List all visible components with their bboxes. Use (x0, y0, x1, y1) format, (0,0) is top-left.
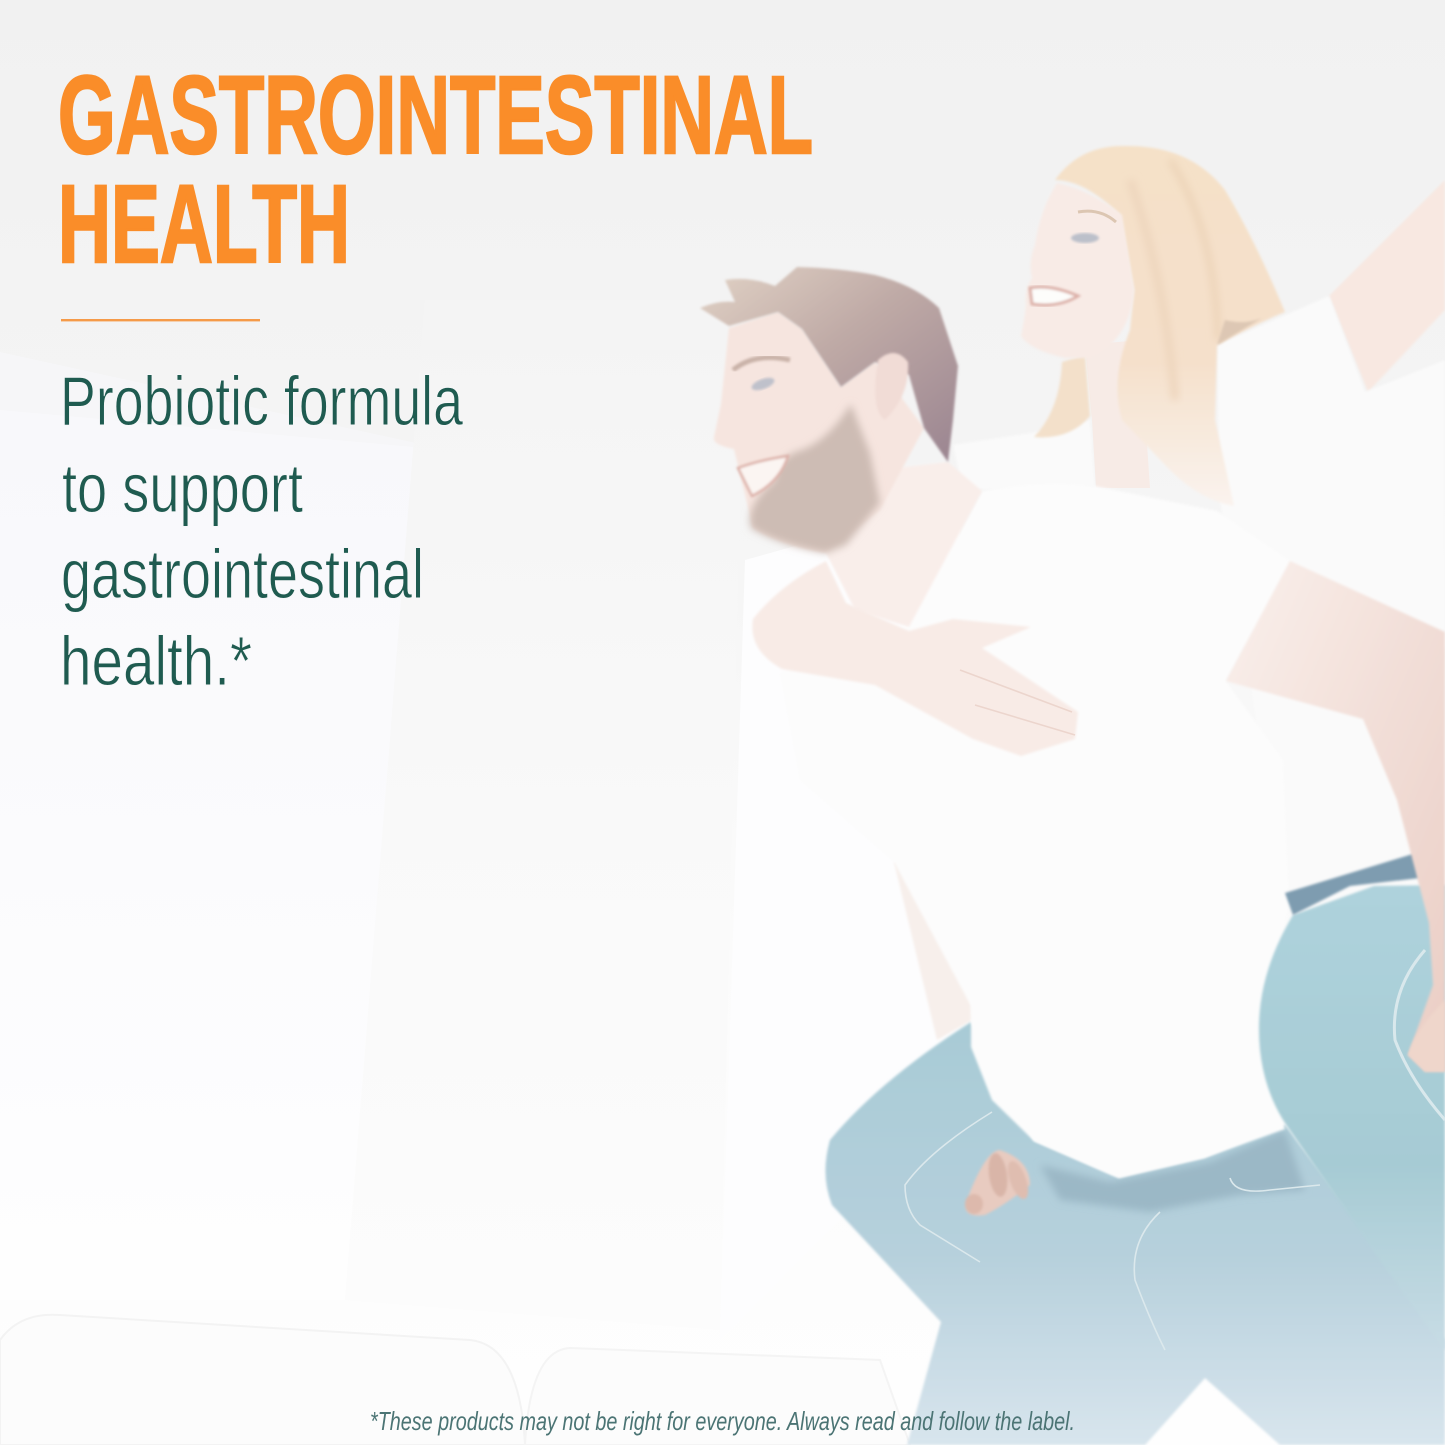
couple photo illustration (700, 146, 1445, 1445)
woman: leg seam (1394, 950, 1445, 1120)
woman: face (1021, 183, 1134, 358)
man: jeans seams (905, 1112, 1320, 1350)
man: jeans (825, 1022, 1445, 1445)
woman: shirt (953, 296, 1445, 895)
man: ear (875, 353, 908, 420)
sofa (0, 1315, 910, 1445)
man: right arm (1226, 561, 1445, 1071)
title: GASTROINTESTINAL (58, 54, 813, 177)
woman: arm and hand around man (752, 561, 1078, 756)
man: eye (750, 375, 776, 393)
man: face (714, 312, 924, 553)
man: eyebrow (733, 358, 790, 370)
orange divider (61, 319, 260, 321)
body copy: Probiotic formula (60, 362, 463, 440)
man: hair (700, 267, 958, 462)
woman: jeans leg (1259, 885, 1445, 1351)
woman: far leg behind man (894, 860, 972, 1040)
body copy: health.* (60, 622, 252, 700)
title (58, 54, 813, 286)
man: shirt (780, 484, 1290, 1178)
man: smile (738, 456, 788, 496)
footnote disclaimer: *These products may not be right for everyone. Always read and follow the label. (370, 1406, 1075, 1436)
woman: raised arm (1329, 180, 1445, 392)
woman: eyebrow (1078, 211, 1116, 222)
man: beard (750, 404, 880, 553)
woman: hair (1055, 146, 1285, 506)
woman: hair back (1034, 355, 1090, 437)
body copy (60, 362, 463, 700)
man: hand on thigh (1408, 1000, 1445, 1072)
man: jeans shadow waist (1040, 1130, 1305, 1212)
body copy: gastrointestinal (61, 535, 424, 613)
man: neck (826, 462, 982, 627)
woman: smile (1030, 287, 1078, 305)
body copy: to support (62, 449, 303, 527)
woman: neck (1085, 340, 1150, 488)
man: hand gripping leg (965, 1150, 1032, 1216)
title: HEALTH (58, 163, 350, 286)
woman: eye (1071, 233, 1099, 243)
woman: waistband (1285, 853, 1420, 915)
